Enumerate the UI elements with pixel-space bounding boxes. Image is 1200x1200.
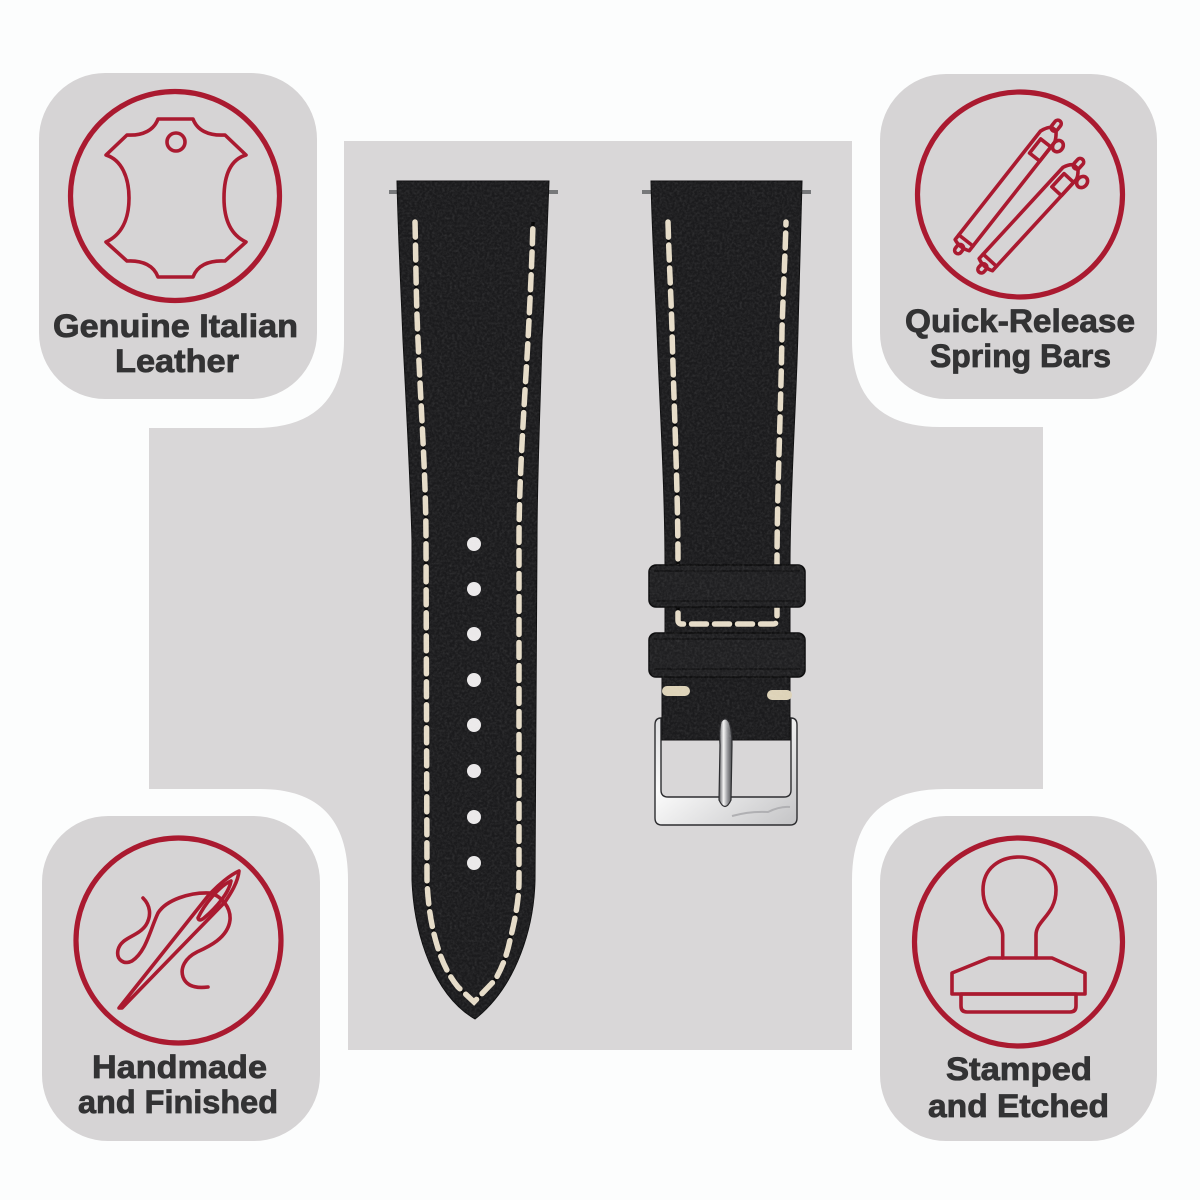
card background: [880, 816, 1157, 1141]
label: [53, 308, 298, 379]
label: [905, 303, 1135, 374]
spring bar pins: [389, 190, 558, 194]
stitching: [415, 222, 533, 1002]
icon: rubber stamp: [914, 838, 1122, 1046]
label: and Finished: [78, 1084, 278, 1120]
buckle engraving: [732, 807, 790, 816]
label: Leather: [115, 343, 239, 379]
label: [78, 1049, 278, 1120]
card: genuine italian leather: [39, 73, 317, 399]
end stitches: [667, 691, 787, 695]
icon: needle and thread: [76, 838, 281, 1043]
label: Handmade: [92, 1049, 267, 1085]
label: Stamped: [946, 1051, 1092, 1087]
texture overlay on leather: [380, 170, 820, 1030]
label: and Etched: [928, 1088, 1109, 1124]
card background: [39, 73, 317, 399]
card: quick-release spring bars: [880, 74, 1157, 399]
short watch strap with buckle: [642, 181, 811, 825]
label: [928, 1051, 1109, 1124]
label: Spring Bars: [930, 338, 1111, 374]
label: Quick-Release: [905, 303, 1135, 339]
card: handmade and finished: [42, 816, 320, 1141]
strap body: [397, 181, 549, 1019]
buckle tongue: [719, 719, 732, 806]
strap body: [651, 181, 802, 740]
strap holes: [467, 537, 481, 870]
card background: [880, 74, 1157, 399]
card background: [42, 816, 320, 1141]
label: Genuine Italian: [53, 308, 298, 344]
long watch strap: [389, 181, 558, 1019]
background panel: [149, 141, 1043, 1050]
buckle frame: [655, 718, 797, 825]
lower keeper: [649, 633, 805, 677]
icon: spring bars: [918, 92, 1122, 297]
upper keeper: [649, 565, 805, 607]
stitching: [668, 222, 786, 624]
icon: leather hide: [70, 92, 280, 300]
spring bar pins: [642, 190, 811, 194]
card: stamped and etched: [880, 816, 1157, 1141]
